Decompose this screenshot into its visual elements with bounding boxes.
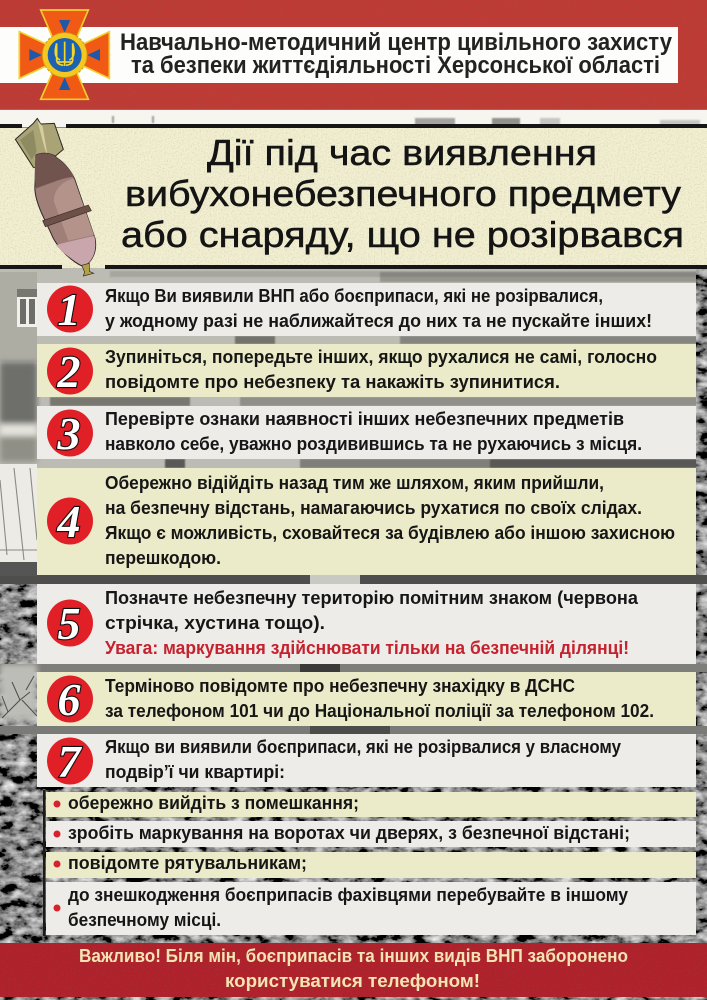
number badge 3 xyxy=(47,408,93,459)
building wall and window xyxy=(0,272,37,362)
bomb band xyxy=(43,205,91,227)
number badge 2 xyxy=(47,346,93,397)
panel: step 5 xyxy=(37,584,696,664)
number badge 4 xyxy=(47,496,93,547)
warning text: Увага: маркування здійснювати тільки на безпечній ділянці! xyxy=(105,638,629,658)
list item 2 xyxy=(46,821,696,847)
panel: step 4: на безпечну відстань, намагаючись рухатися по своїх слідах. xyxy=(105,498,642,518)
list item 3: повідомте рятувальникам; xyxy=(68,853,307,873)
panel: step 3: Перевірте ознаки наявності інших небезпечних предметів xyxy=(105,409,624,429)
panel: step 7: подвір’ї чи квартирі: xyxy=(105,762,285,782)
title panel xyxy=(0,124,707,269)
ground: lit strip with bare branches xyxy=(0,664,37,720)
list item 2: зробіть маркування на воротах чи дверях, з безпечної відстані; xyxy=(68,823,630,843)
panel: step 6 xyxy=(37,672,696,726)
panel: step 1 xyxy=(37,283,696,336)
number badge 5 xyxy=(47,598,93,649)
panel: step 3: навколо себе, уважно роздивившись та не рухаючись з місця. xyxy=(105,434,642,454)
list item 4 xyxy=(46,882,696,935)
panel: step 4: Обережно відійдіть назад тим же шляхом, яким прийшли, xyxy=(105,473,604,493)
panel: step 5: Позначте небезпечну територію помітним знаком (червона xyxy=(105,588,639,608)
header organisation name xyxy=(120,29,673,79)
list item 1: обережно вийдіть з помешкання; xyxy=(68,793,359,813)
step 7 sub-list xyxy=(43,790,696,936)
footer warning text xyxy=(79,946,628,991)
header band xyxy=(0,0,707,109)
footer warning text: користуватися телефоном! xyxy=(225,971,480,991)
number badge 3: 3 xyxy=(56,408,80,459)
number badge 2: 2 xyxy=(56,346,80,397)
panel: step 1: Якщо Ви виявили ВНП або боєприпаси, які не розірвалися, xyxy=(105,286,603,306)
tail fins xyxy=(15,118,63,169)
list item 1 xyxy=(46,792,696,817)
header organisation name: Навчально-методичний центр цивільного захисту xyxy=(120,29,673,56)
panel: step 6: Терміново повідомте про небезпечну знахідку в ДСНС xyxy=(105,676,575,696)
footer warning text: Важливо! Біля мін, боєприпасів та інших видів ВНП заборонено xyxy=(79,946,628,966)
header organisation name: та безпеки життєдіяльності Херсонської області xyxy=(131,52,660,79)
number badge 7 xyxy=(47,736,93,787)
number badge 1 xyxy=(47,284,93,335)
footer warning band xyxy=(0,943,707,997)
bomb body xyxy=(35,153,96,267)
panel: step 5: стрічка, хустина тощо). xyxy=(105,613,325,633)
number badge 7: 7 xyxy=(58,736,82,787)
number badge 4: 4 xyxy=(56,496,80,547)
icon: civil protection emblem xyxy=(19,10,109,99)
panel: step 7 xyxy=(37,734,696,787)
title text xyxy=(121,132,684,255)
panel: step 2: Зупиніться, попередьте інших, якщо рухалися не самі, голосно xyxy=(105,347,657,367)
panel: step 6: за телефоном 101 чи до Національної поліції за телефоном 102. xyxy=(105,701,654,721)
title text: Дії під час виявлення xyxy=(207,132,597,173)
header white strip xyxy=(0,27,678,83)
title text: вибухонебезпечного предмету xyxy=(125,173,681,214)
panel: step 1: у жодному разі не наближайтеся до них та не пускайте інших! xyxy=(105,311,652,331)
panel: step 4 xyxy=(37,468,696,575)
icon: aerial bomb xyxy=(15,118,96,276)
panel: step 3 xyxy=(37,406,696,459)
title text: або снаряду, що не розірвався xyxy=(121,214,684,255)
list item 4: безпечному місці. xyxy=(68,910,221,930)
number badge 6 xyxy=(47,674,93,725)
panel: step 7: Якщо ви виявили боєприпаси, які не розірвалися у власному xyxy=(105,737,621,757)
panel: step 2: повідомте про небезпеку та накажіть зупинитися. xyxy=(105,372,560,392)
shrubs xyxy=(0,362,37,462)
list item 3 xyxy=(46,852,696,878)
panel: step 4: Якщо є можливість, сховайтеся за будівлею або іншою захисною xyxy=(105,523,675,543)
bomb nose fuse xyxy=(82,263,94,276)
number badge 6: 6 xyxy=(58,674,80,725)
white fence xyxy=(0,464,37,576)
panel: step 4: перешкодою. xyxy=(105,548,221,568)
number badge 5: 5 xyxy=(58,598,80,649)
list item 4: до знешкодження боєприпасів фахівцями перебувайте в іншому xyxy=(68,885,628,905)
number badge 1: 1 xyxy=(58,284,80,335)
panel: step 2 xyxy=(37,344,696,397)
